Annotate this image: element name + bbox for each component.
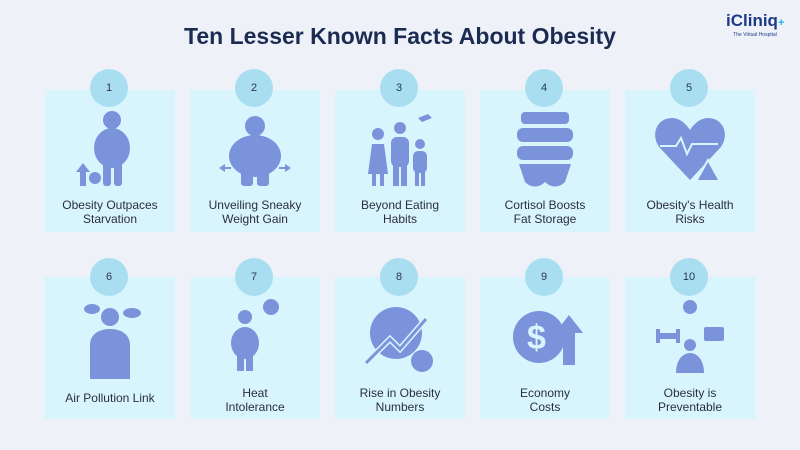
label: Fat Storage bbox=[514, 212, 576, 226]
label: Rise in Obesity bbox=[360, 386, 440, 400]
label: Beyond Eating bbox=[361, 198, 439, 212]
card 2 bbox=[190, 90, 320, 232]
badge 2: 2 bbox=[251, 82, 257, 94]
card 1 bbox=[45, 90, 175, 232]
icon: torso bbox=[517, 112, 573, 186]
label: Habits bbox=[383, 212, 417, 226]
label bbox=[505, 198, 585, 226]
label: Cortisol Boosts bbox=[505, 198, 585, 212]
label: Obesity's Health bbox=[646, 198, 734, 212]
card 9 bbox=[480, 277, 610, 419]
label bbox=[209, 198, 302, 226]
badge 7: 7 bbox=[251, 271, 257, 283]
label bbox=[646, 198, 734, 226]
label: Costs bbox=[530, 400, 560, 414]
label: Weight Gain bbox=[222, 212, 288, 226]
label: Obesity Outpaces bbox=[62, 198, 158, 212]
icon: obese person bbox=[76, 111, 130, 186]
card 3 bbox=[335, 90, 465, 232]
badge 10 bbox=[670, 258, 708, 296]
badge 5: 5 bbox=[686, 82, 692, 94]
badge 2 bbox=[235, 69, 273, 107]
badge 3 bbox=[380, 69, 418, 107]
label bbox=[658, 386, 722, 414]
card 7 bbox=[190, 277, 320, 419]
badge 3: 3 bbox=[396, 82, 402, 94]
badge 8: 8 bbox=[396, 271, 402, 283]
badge 6: 6 bbox=[106, 271, 112, 283]
icon: dollar up bbox=[513, 311, 583, 365]
label: Intolerance bbox=[225, 400, 285, 414]
label: Economy bbox=[520, 386, 570, 400]
icon: dollar up: $ bbox=[527, 319, 546, 357]
card 6 bbox=[45, 277, 175, 419]
icon: heat person bbox=[231, 299, 279, 371]
icon: globe rising bbox=[365, 307, 433, 372]
icon: prevention bbox=[656, 300, 724, 373]
badge 7 bbox=[235, 258, 273, 296]
label bbox=[361, 198, 439, 226]
label: Obesity is bbox=[664, 386, 716, 400]
badge 8 bbox=[380, 258, 418, 296]
title: Ten Lesser Known Facts About Obesity bbox=[184, 23, 616, 49]
label bbox=[520, 386, 570, 414]
badge 6 bbox=[90, 258, 128, 296]
badge 4 bbox=[525, 69, 563, 107]
logo: iCliniq+ bbox=[726, 11, 784, 30]
badge 4: 4 bbox=[541, 82, 547, 94]
card 5 bbox=[625, 90, 755, 232]
label: Heat bbox=[242, 386, 268, 400]
card 10 bbox=[625, 277, 755, 419]
card 8 bbox=[335, 277, 465, 419]
icon: wide person bbox=[219, 116, 291, 186]
label: Numbers bbox=[376, 400, 424, 414]
label bbox=[360, 386, 440, 414]
badge 1: 1 bbox=[106, 82, 112, 94]
label: Air Pollution Link bbox=[65, 391, 155, 405]
badge 5 bbox=[670, 69, 708, 107]
label: Risks bbox=[675, 212, 705, 226]
logo: The Virtual Hospital bbox=[733, 32, 777, 38]
icon: air pollution bbox=[84, 304, 141, 379]
badge 9 bbox=[525, 258, 563, 296]
label: Starvation bbox=[83, 212, 137, 226]
badge 9: 9 bbox=[541, 271, 547, 283]
label bbox=[225, 386, 285, 414]
badge 1 bbox=[90, 69, 128, 107]
icon: heart warning bbox=[655, 118, 725, 180]
label: Unveiling Sneaky bbox=[209, 198, 301, 212]
label: Preventable bbox=[658, 400, 722, 414]
card 4 bbox=[480, 90, 610, 232]
label bbox=[62, 198, 158, 226]
icon: family bbox=[368, 114, 432, 186]
badge 10: 10 bbox=[683, 271, 695, 283]
